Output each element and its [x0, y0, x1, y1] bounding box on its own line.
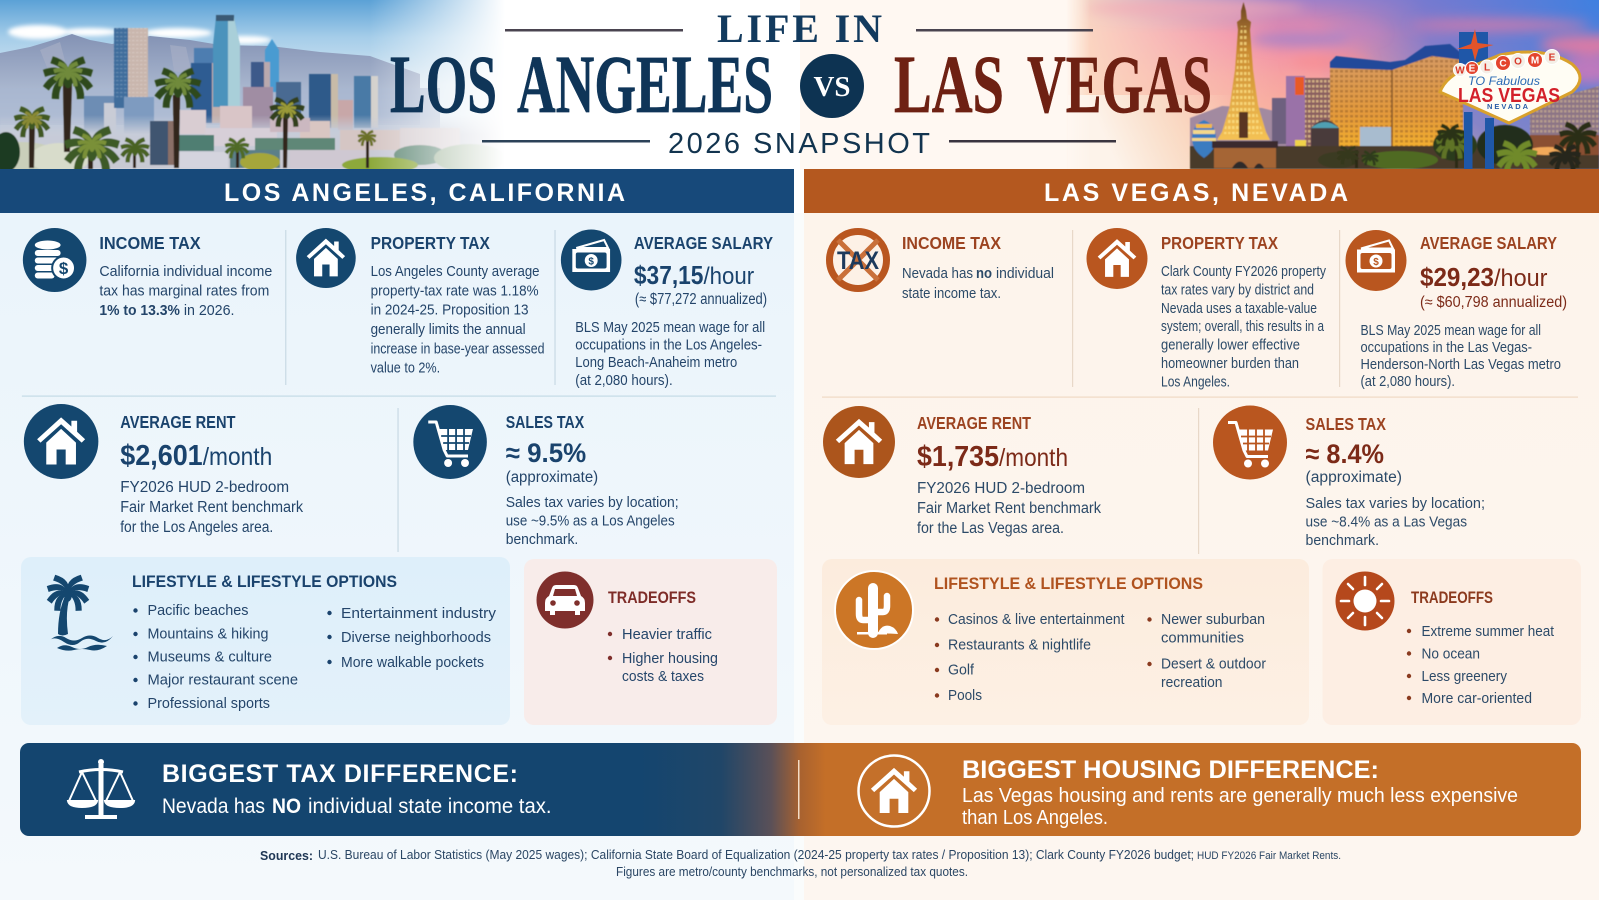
sources footnote: HUD FY2026 Fair Market Rents. [1197, 850, 1341, 862]
LV sales tax: (approximate) [1306, 469, 1402, 486]
LA average rent: /month [203, 443, 272, 471]
callout: biggest housing difference: than Los Angeles. [962, 807, 1108, 829]
callout: biggest tax difference: Nevada has [162, 795, 265, 818]
icon: Welcome to Las Vegas sign: W [1455, 66, 1465, 76]
LV average rent: AVERAGE RENT [917, 413, 1031, 433]
LV average salary: (≈ $60,798 annualized) [1420, 294, 1567, 311]
LV property tax: Los Angeles. [1161, 374, 1230, 390]
callout: biggest housing difference [858, 756, 1518, 829]
LA property tax: in 2024-25. Proposition 13 [371, 302, 529, 319]
LA average salary [561, 230, 773, 389]
LA average rent: Fair Market Rent benchmark [120, 499, 303, 516]
panel: Las Vegas lifestyle [822, 559, 1309, 725]
title: Los Angeles [390, 38, 773, 130]
icon: banknotes [561, 230, 621, 290]
list: LA lifestyle column one: Professional sports [148, 695, 270, 712]
list: LV lifestyle column two: Desert & outdoor [1161, 656, 1266, 672]
callout: biggest housing difference: Las Vegas housing and rents are generally much less expensive [962, 785, 1518, 807]
panel: Los Angeles tradeoffs [524, 559, 777, 725]
callout banner: biggest differences [20, 743, 1581, 836]
LA average salary: BLS May 2025 mean wage for all [575, 320, 765, 336]
LV average salary: BLS May 2025 mean wage for all [1360, 323, 1541, 339]
title block [390, 6, 1212, 160]
list: LA lifestyle column two [327, 605, 497, 671]
list: LV lifestyle column one: Restaurants & nightlife [948, 636, 1091, 654]
LA average salary: (at 2,080 hours). [575, 373, 673, 389]
LA income tax: 1% to 13.3% [99, 302, 180, 319]
LA average rent: for the Los Angeles area. [120, 519, 273, 536]
LA average salary: occupations in the Los Angeles- [575, 337, 762, 354]
LV property tax: system; overall, this results in a [1161, 319, 1325, 335]
sources footnote: U.S. Bureau of Labor Statistics (May 2025 wages); California State Board of Equalization (2024-25 property tax rates / Proposition 13); Clark County FY2026 budget; [318, 847, 1194, 862]
LA property tax: value to 2%. [371, 360, 440, 377]
icon: Welcome to Las Vegas sign [1440, 29, 1580, 169]
heading band: Los Angeles, California: LOS ANGELES, CALIFORNIA [224, 179, 625, 207]
LV income tax: no [976, 265, 992, 282]
list: LA lifestyle column two: Diverse neighborhoods [341, 629, 491, 646]
LV average salary: $29,23 [1420, 262, 1494, 292]
badge: vs [800, 54, 864, 118]
LV property tax: tax rates vary by district and [1161, 282, 1314, 298]
icon: Welcome to Las Vegas sign: C [1499, 58, 1507, 70]
LA average salary: Long Beach-Anaheim metro [575, 355, 737, 371]
title: Los Angeles: ANGELES [517, 38, 773, 130]
LV property tax: PROPERTY TAX [1161, 233, 1278, 253]
LA sales tax: ≈ 9.5% [506, 438, 586, 468]
icon: palm tree and waves [45, 572, 113, 651]
LA average rent: AVERAGE RENT [120, 412, 236, 432]
list: LV lifestyle column two: recreation [1161, 674, 1222, 691]
LV sales tax: ≈ 8.4% [1306, 439, 1384, 469]
panel: Los Angeles tradeoffs: TRADEOFFS [608, 588, 696, 607]
callout: biggest tax difference [68, 759, 552, 819]
list: LV tradeoffs: Less greenery [1422, 668, 1507, 685]
icon: no tax: TAX [837, 247, 879, 275]
LA property tax: generally limits the annual [371, 321, 526, 338]
list: LV lifestyle column two [1147, 611, 1266, 691]
icon: shopping cart [413, 405, 487, 479]
LA property tax [296, 228, 544, 377]
list: LV lifestyle column one: Golf [948, 662, 975, 678]
icon: house in ring [858, 756, 930, 826]
icon: scales [68, 759, 134, 819]
LA average salary: /hour [703, 263, 754, 290]
list: LV lifestyle column one [935, 611, 1125, 704]
list: LA tradeoffs [608, 626, 718, 685]
icon: Welcome to Las Vegas sign: O [1514, 56, 1522, 68]
icon: no tax [830, 232, 886, 288]
LA sales tax: (approximate) [506, 469, 598, 486]
badge: vs: VS [814, 71, 850, 103]
LV sales tax [1213, 406, 1485, 549]
title: Las Vegas: LAS [894, 38, 1004, 130]
LV average rent: FY2026 HUD 2-bedroom [917, 480, 1085, 497]
subtitle: 2026 snapshot: 2026 SNAPSHOT [668, 128, 930, 160]
list: LV lifestyle column two: Newer suburban [1161, 611, 1265, 628]
icon: cactus [835, 571, 913, 649]
LA average salary: AVERAGE SALARY [634, 233, 773, 253]
LV average rent: $1,735 [917, 441, 999, 473]
LV average salary: /hour [1494, 265, 1548, 292]
icon: Welcome to Las Vegas sign: NEVADA [1487, 102, 1529, 111]
LA sales tax: use ~9.5% as a Los Angeles [506, 512, 675, 530]
icon: Welcome to Las Vegas sign: LAS VEGAS [1458, 85, 1560, 107]
panel: Las Vegas lifestyle: LIFESTYLE & LIFESTYLE OPTIONS [934, 574, 1203, 593]
title: Life in: LIFE IN [717, 6, 882, 51]
LV income tax: INCOME TAX [902, 233, 1001, 253]
LV sales tax: benchmark. [1306, 532, 1379, 549]
LA sales tax: benchmark. [506, 531, 578, 548]
LA property tax: property-tax rate was 1.18% [371, 282, 539, 299]
LA average rent [24, 404, 303, 536]
LA average salary: (≈ $77,272 annualized) [635, 291, 767, 308]
LA income tax [23, 228, 272, 319]
LV income tax [830, 232, 1054, 302]
LV property tax: Clark County FY2026 property [1161, 264, 1327, 280]
icon: coins [23, 228, 86, 292]
panel: Las Vegas facts [822, 228, 1578, 554]
list: LA lifestyle column two: More walkable pockets [341, 654, 484, 671]
LV average rent: for the Las Vegas area. [917, 520, 1064, 537]
LA income tax: tax has marginal rates from [99, 282, 269, 300]
panel: Los Angeles lifestyle: LIFESTYLE & LIFESTYLE OPTIONS [132, 572, 397, 591]
list: LA lifestyle column one: Museums & culture [148, 648, 272, 666]
list: LV tradeoffs [1407, 623, 1555, 707]
list: LA tradeoffs: Higher housing [622, 650, 718, 667]
LV property tax: Nevada uses a taxable-value [1161, 301, 1317, 317]
LV sales tax: Sales tax varies by location; [1306, 495, 1485, 512]
list: LA lifestyle column one: Pacific beaches [148, 602, 248, 619]
LV sales tax: use ~8.4% as a Las Vegas [1306, 514, 1467, 530]
list: LV lifestyle column one: Casinos & live entertainment [948, 611, 1125, 628]
list: LV lifestyle column two: communities [1161, 630, 1244, 646]
icon: coins: $ [59, 259, 69, 278]
list: LV tradeoffs: More car-oriented [1422, 690, 1532, 707]
icon: house [296, 228, 356, 288]
callout: biggest tax difference: individual state income tax. [308, 795, 552, 818]
LA sales tax: Sales tax varies by location; [506, 494, 679, 511]
LV income tax: individual [996, 265, 1054, 282]
panel: Las Vegas tradeoffs: TRADEOFFS [1411, 588, 1493, 607]
callout: biggest housing difference: BIGGEST HOUSING DIFFERENCE: [962, 756, 1379, 784]
heading band: Las Vegas, Nevada: LAS VEGAS, NEVADA [1044, 179, 1348, 207]
heading band: Las Vegas, Nevada [804, 169, 1599, 213]
title: Las Vegas: VEGAS [1027, 38, 1212, 130]
list: LA lifestyle column one: Mountains & hiking [148, 626, 268, 642]
icon: banknotes: $ [588, 256, 594, 268]
LV average salary: Henderson-North Las Vegas metro [1360, 357, 1561, 373]
list: LV tradeoffs: Extreme summer heat [1422, 623, 1555, 640]
LV income tax: Nevada has [902, 265, 973, 282]
LV property tax: homeowner burden than [1161, 356, 1299, 372]
list: LA lifestyle column one: Major restaurant scene [148, 672, 298, 688]
icon: Welcome to Las Vegas sign: L [1484, 62, 1490, 74]
icon: car [536, 572, 594, 628]
LV average salary [1346, 230, 1567, 390]
list: LA tradeoffs: costs & taxes [622, 668, 704, 685]
LV average rent: /month [999, 444, 1068, 472]
LA average rent: $2,601 [120, 440, 203, 472]
list: LV tradeoffs: No ocean [1422, 646, 1480, 662]
list: LV lifestyle column one: Pools [948, 687, 982, 704]
LA income tax: California individual income [99, 263, 272, 280]
list: LA lifestyle column two: Entertainment industry [341, 605, 497, 622]
icon: Welcome to Las Vegas sign: M [1531, 56, 1539, 66]
icon: house [24, 404, 98, 479]
panel: Los Angeles facts [22, 228, 776, 552]
list: LA lifestyle column one [133, 602, 298, 712]
LA average salary: $37,15 [634, 262, 703, 290]
LA sales tax: SALES TAX [506, 412, 585, 432]
LV sales tax: SALES TAX [1306, 414, 1386, 434]
LV average salary: AVERAGE SALARY [1420, 233, 1557, 253]
sources footnote: Sources: [260, 848, 313, 863]
title: Las Vegas [894, 38, 1212, 130]
icon: Welcome to Las Vegas sign: E [1469, 64, 1476, 74]
title: Los Angeles: LOS [390, 38, 497, 130]
LA income tax: INCOME TAX [99, 233, 201, 253]
LA property tax: increase in base-year assessed [371, 340, 544, 357]
LV average salary: (at 2,080 hours). [1360, 374, 1455, 390]
icon: house [1086, 228, 1148, 289]
LA average rent: FY2026 HUD 2-bedroom [120, 479, 289, 496]
sources footnote [260, 847, 1341, 879]
icon: banknotes: $ [1373, 257, 1379, 268]
icon: Welcome to Las Vegas sign: E [1549, 52, 1556, 64]
callout: biggest tax difference: NO [272, 795, 301, 818]
icon: shopping cart [1213, 406, 1287, 480]
LV property tax: generally lower effective [1161, 338, 1300, 354]
illustration: Los Angeles skyline [0, 0, 498, 169]
LA property tax: Los Angeles County average [371, 263, 540, 280]
sources footnote: Figures are metro/county benchmarks, not personalized tax quotes. [616, 864, 968, 879]
LV average rent: Fair Market Rent benchmark [917, 500, 1101, 517]
icon: house [823, 406, 895, 478]
LV income tax: state income tax. [902, 285, 1001, 302]
list: LA tradeoffs: Heavier traffic [622, 626, 712, 643]
icon: Welcome to Las Vegas sign: TO Fabulous [1468, 74, 1540, 88]
icon: banknotes [1346, 230, 1406, 291]
panel: Las Vegas tradeoffs [1322, 559, 1581, 725]
LV average rent [823, 406, 1101, 537]
LA sales tax [413, 405, 679, 548]
LA income tax: in 2026. [184, 302, 234, 319]
icon: sun [1336, 572, 1394, 630]
callout: biggest tax difference: BIGGEST TAX DIFFERENCE: [162, 760, 518, 788]
LV property tax [1086, 228, 1327, 390]
LV average salary: occupations in the Las Vegas- [1360, 340, 1532, 356]
illustration: Las Vegas skyline [1070, 0, 1599, 169]
panel: Los Angeles lifestyle [21, 557, 510, 725]
LA property tax: PROPERTY TAX [371, 233, 490, 253]
heading band: Los Angeles, California [0, 169, 794, 213]
